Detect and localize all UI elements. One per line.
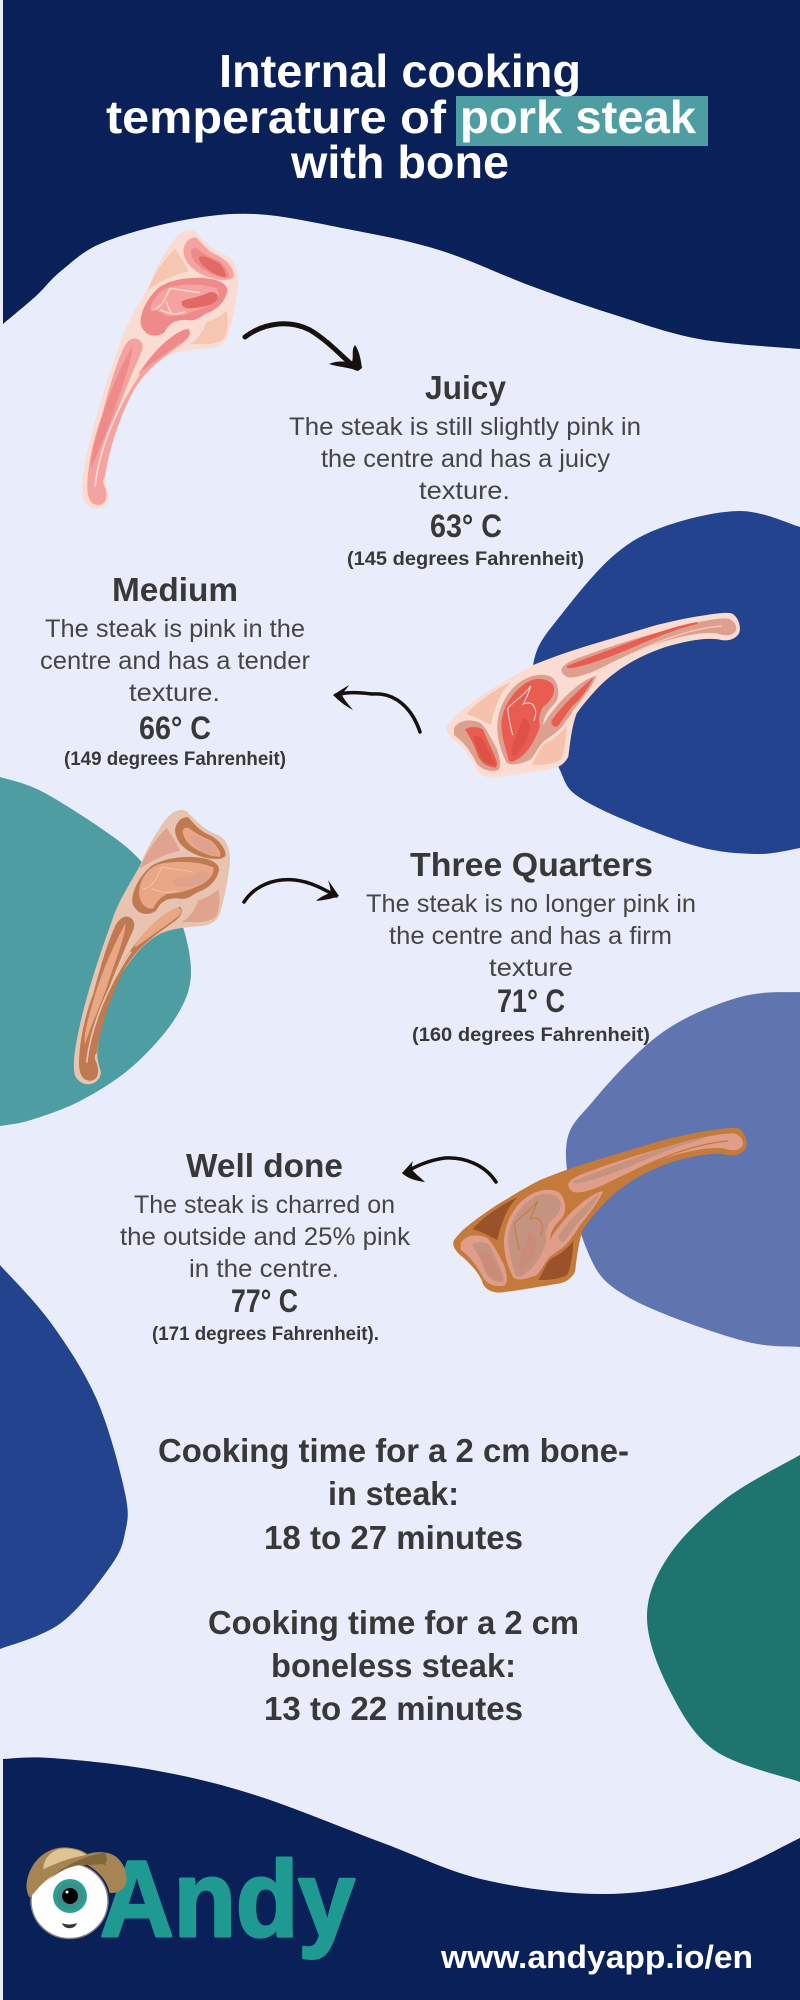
text: medium [40,571,310,770]
text: juicy: Juicy [425,369,507,406]
logo: Andy: Andy [100,1838,355,1959]
arrow: well done [402,1158,496,1182]
text: cooking time boneless: boneless steak: [271,1647,516,1684]
text: juicy: 63° C [430,508,502,544]
text: cooking time with bone: 18 to 27 minutes [264,1519,523,1556]
text: medium: The steak is pink in the [45,615,305,643]
title: with bone [290,136,509,188]
text: three quarters: texture [489,954,573,982]
website url: www.andyapp.io/en [440,1939,753,1975]
text: three quarters: 71° C [497,983,565,1019]
text: medium: texture. [129,679,220,707]
blob: periwinkle right [566,992,800,1347]
text: well done: Well done [186,1147,343,1184]
illustration: well done steak [453,1128,747,1293]
illustration: juicy steak [82,230,238,509]
text: juicy: texture. [419,477,510,505]
blob: teal left [0,777,191,1126]
text: three quarters: Three Quarters [410,846,653,883]
text: juicy: The steak is still slightly pink in [289,413,641,441]
blob: dark blue lower left [0,1265,128,1649]
text: cooking time with bone: in steak: [328,1475,459,1512]
text: well done: (171 degrees Fahrenheit). [152,1324,379,1345]
text: medium: centre and has a tender [40,647,310,675]
title: temperature of [106,91,447,143]
blob: dark blue upper right [533,511,800,854]
title: pork steak [460,91,696,143]
text: three quarters: the centre and has a firm [389,922,672,950]
arrow: juicy [245,324,362,371]
title [106,45,708,188]
text: well done: The steak is charred on [134,1191,395,1219]
illustration: three quarters steak [74,810,230,1084]
text: cooking time boneless: Cooking time for a 2 cm [208,1604,579,1641]
text: three quarters: (160 degrees Fahrenheit) [412,1025,650,1046]
illustration: medium steak [447,613,740,778]
arrow: medium [333,685,420,732]
title: Internal cooking [219,45,581,97]
text: cooking time boneless: 13 to 22 minutes [264,1690,523,1727]
text: three quarters: The steak is no longer pink in [366,890,696,918]
header wave background [3,0,800,349]
text: cooking time with bone [158,1432,629,1556]
arrow: three quarters [244,880,339,902]
text: medium: Medium [112,571,238,608]
text: well done: 77° C [231,1283,298,1319]
text: medium: (149 degrees Fahrenheit) [64,749,286,770]
text: cooking time with bone: Cooking time for a 2 cm bone- [158,1432,629,1469]
text: medium: 66° C [139,710,211,746]
text: cooking time boneless [208,1604,579,1727]
blob: green lower right [647,1455,800,1782]
footer wave background [3,1757,800,2000]
text: well done: in the centre. [189,1255,339,1283]
text: three quarters [366,846,696,1046]
text: juicy: the centre and has a juicy [321,445,611,473]
text: juicy: (145 degrees Fahrenheit) [347,549,584,570]
text: well done [120,1147,411,1345]
text: juicy [289,369,641,570]
text: well done: the outside and 25% pink [120,1223,411,1251]
